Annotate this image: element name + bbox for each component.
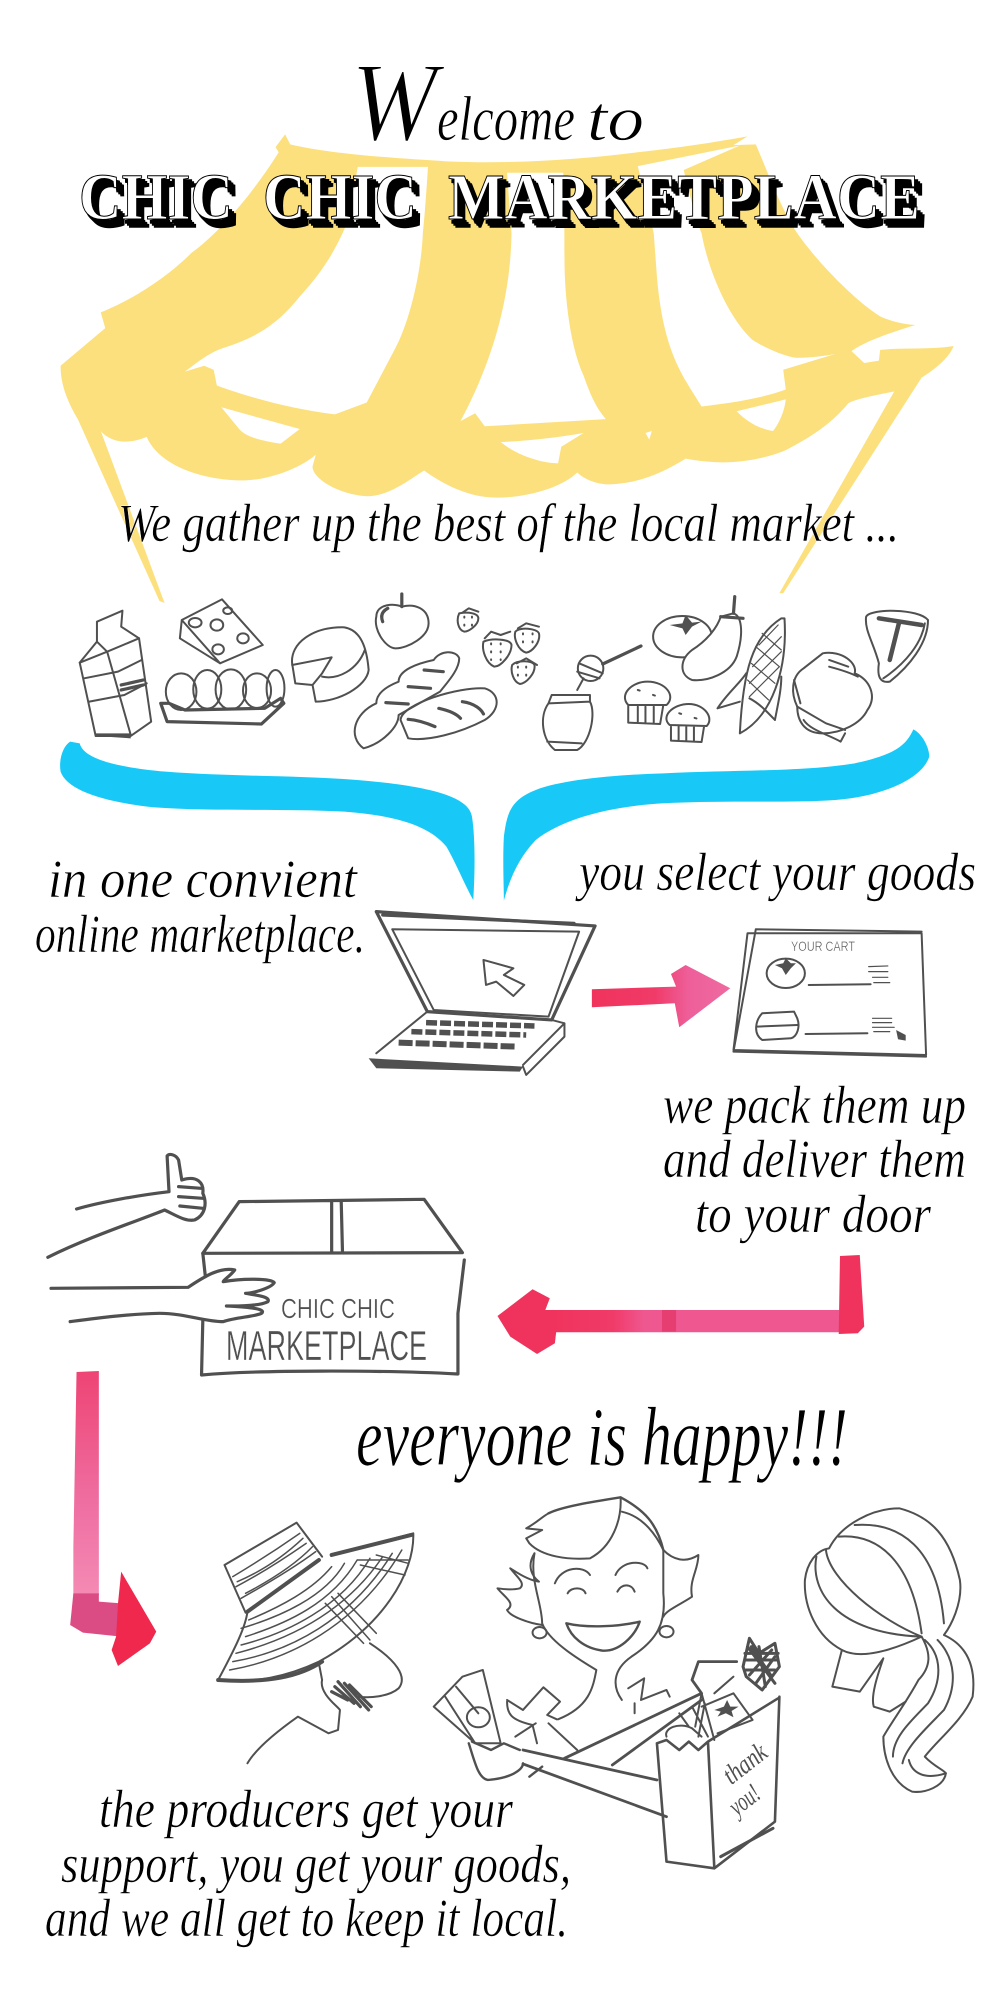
text: thank you on bag: you! [721,1778,766,1823]
arrow: pink arrow down and right [70,1371,156,1666]
illustration: smiling shopper head [497,1497,698,1719]
title: Chic Chic Marketplace: MARKETPLACE [451,165,923,238]
illustration: shopper torso, arms and money [434,1662,737,1817]
title: Chic Chic Marketplace: CHIC [266,165,420,238]
icon: your cart page [733,929,926,1057]
icon: egg carton [161,669,284,724]
text: in one convient online marketplace: in one convient [48,849,359,909]
text: thank you on bag [717,1736,774,1823]
icon: milk carton [80,611,151,738]
icon: laptop with cursor [369,912,595,1075]
text: box label [226,1293,427,1369]
text: the producers get your support, you get your goods, and we all get to keep it local: the producers get your [99,1779,514,1839]
title: Chic Chic Marketplace: MARKETPLACE [448,161,920,234]
title: Welcome to: to [587,83,644,154]
awning: yellow market canopy [61,134,954,603]
icon: corn cob [718,618,785,733]
title: Chic Chic Marketplace: MARKETPLACE [453,167,925,240]
icon: T-bone steak [866,611,928,682]
title: Chic Chic Marketplace: CHIC [84,167,238,240]
arrow: pink arrow to the left [497,1255,864,1354]
title: Chic Chic Marketplace: CHIC [79,161,233,234]
text: we pack them up and deliver them to your door: to your door [695,1184,932,1244]
text: box label: MARKETPLACE [226,1322,427,1369]
awning opening between stripes two and three [460,173,606,426]
title: Chic Chic Marketplace: CHIC [268,167,422,240]
valance gaps [221,399,786,463]
text: the producers get your support, you get your goods, and we all get to keep it local: support, you get your goods, [61,1834,571,1894]
arrow: blue funnel into the laptop [60,729,929,901]
text: the producers get your support, you get your goods, and we all get to keep it local [45,1779,571,1948]
title: Chic Chic Marketplace: MARKETPLACE [455,169,927,242]
illustration: woman with ponytail from behind [805,1508,973,1792]
awning opening between stripes three and four [638,146,836,406]
icon: roast chicken [793,653,872,742]
title: Welcome to [351,41,644,165]
icon: strawberries [458,608,539,684]
icon: baguette and bread loaf [355,652,497,748]
text: in one convient online marketplace [35,849,365,964]
awning opening between stripes one and two [185,167,428,414]
icon: honey jar and dipper [543,646,641,750]
arrow: pink arrow to cart [592,965,730,1027]
text: box label: CHIC CHIC [281,1293,395,1324]
text: your cart: YOUR CART [791,938,855,954]
text: we pack them up and deliver them to your door [663,1075,966,1244]
icon: delivery box [202,1199,464,1375]
icon: swiss cheese wedge [180,599,263,663]
title: Welcome to: W [351,41,445,165]
awning silhouette [61,134,954,603]
illustration: producer in wide hat [218,1523,413,1763]
title: Chic Chic Marketplace: CHIC [82,165,236,238]
title: Chic Chic Marketplace: CHIC [86,169,240,242]
icon: tomato and eggplant [653,597,743,680]
icon: hand holding box [51,1269,274,1322]
title: Chic Chic Marketplace [79,161,927,242]
title: Chic Chic Marketplace: CHIC [263,161,417,234]
text: the producers get your support, you get your goods, and we all get to keep it local: and we all get to keep it local. [45,1888,568,1948]
icon: cheese wheel [292,627,369,702]
icon: thumbs-up hand [48,1155,205,1257]
title: Welcome to: elcome [437,83,575,154]
text: in one convient online marketplace: online marketplace. [35,904,365,964]
icon: muffins [625,682,709,742]
title: Chic Chic Marketplace: CHIC [270,169,424,242]
illustration: thank-you grocery bag [657,1638,779,1868]
icon: apple [376,594,429,648]
text: thank you on bag: thank [717,1736,774,1790]
